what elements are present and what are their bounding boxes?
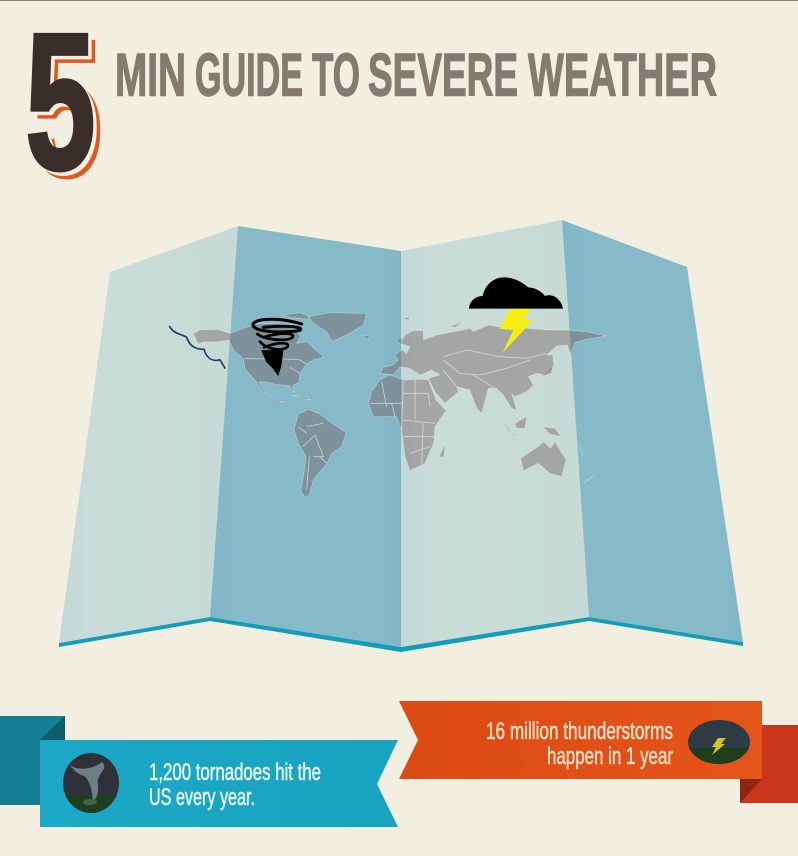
icon: storm circle — [688, 720, 750, 764]
ribbon body — [40, 740, 398, 827]
ribbon text: 16 million thunderstorms — [486, 718, 673, 745]
ribbon text — [149, 759, 321, 811]
ribbon body — [399, 701, 762, 779]
icon: storm cloud with lightning — [469, 277, 563, 353]
title: TO — [312, 42, 360, 108]
cloud — [469, 277, 563, 309]
map panel 2 — [210, 226, 401, 647]
title — [115, 42, 717, 108]
ribbon text — [486, 718, 673, 770]
ribbon text: happen in 1 year — [547, 743, 673, 770]
icon: tornado — [253, 319, 302, 375]
title: MIN — [115, 42, 186, 108]
ribbon: tornadoes — [0, 716, 398, 827]
map panel 3 — [401, 220, 589, 647]
map bottom edge — [59, 617, 743, 652]
Americas — [193, 313, 370, 497]
big number 5: 5 — [28, 0, 99, 214]
ribbon tail — [740, 725, 798, 803]
map panel 4 — [562, 220, 743, 642]
ribbon text: US every year. — [149, 784, 255, 811]
ribbon: thunderstorms — [399, 701, 798, 803]
folded map — [59, 220, 743, 652]
lightning bolt — [499, 308, 533, 353]
title: GUIDE — [195, 42, 303, 108]
ribbon fold — [40, 716, 65, 740]
icon: tornado circle — [63, 753, 119, 813]
world map — [193, 313, 607, 497]
map panel 1 — [59, 226, 238, 643]
ribbon fold — [740, 779, 762, 803]
title: SEVERE — [368, 42, 518, 108]
ribbon text: 1,200 tornadoes hit the — [149, 759, 321, 786]
big number 5: 5 — [32, 0, 103, 217]
ribbon tail — [0, 716, 65, 805]
icon: coastline wave — [169, 326, 225, 369]
Eurasia Africa Australia — [368, 317, 607, 483]
